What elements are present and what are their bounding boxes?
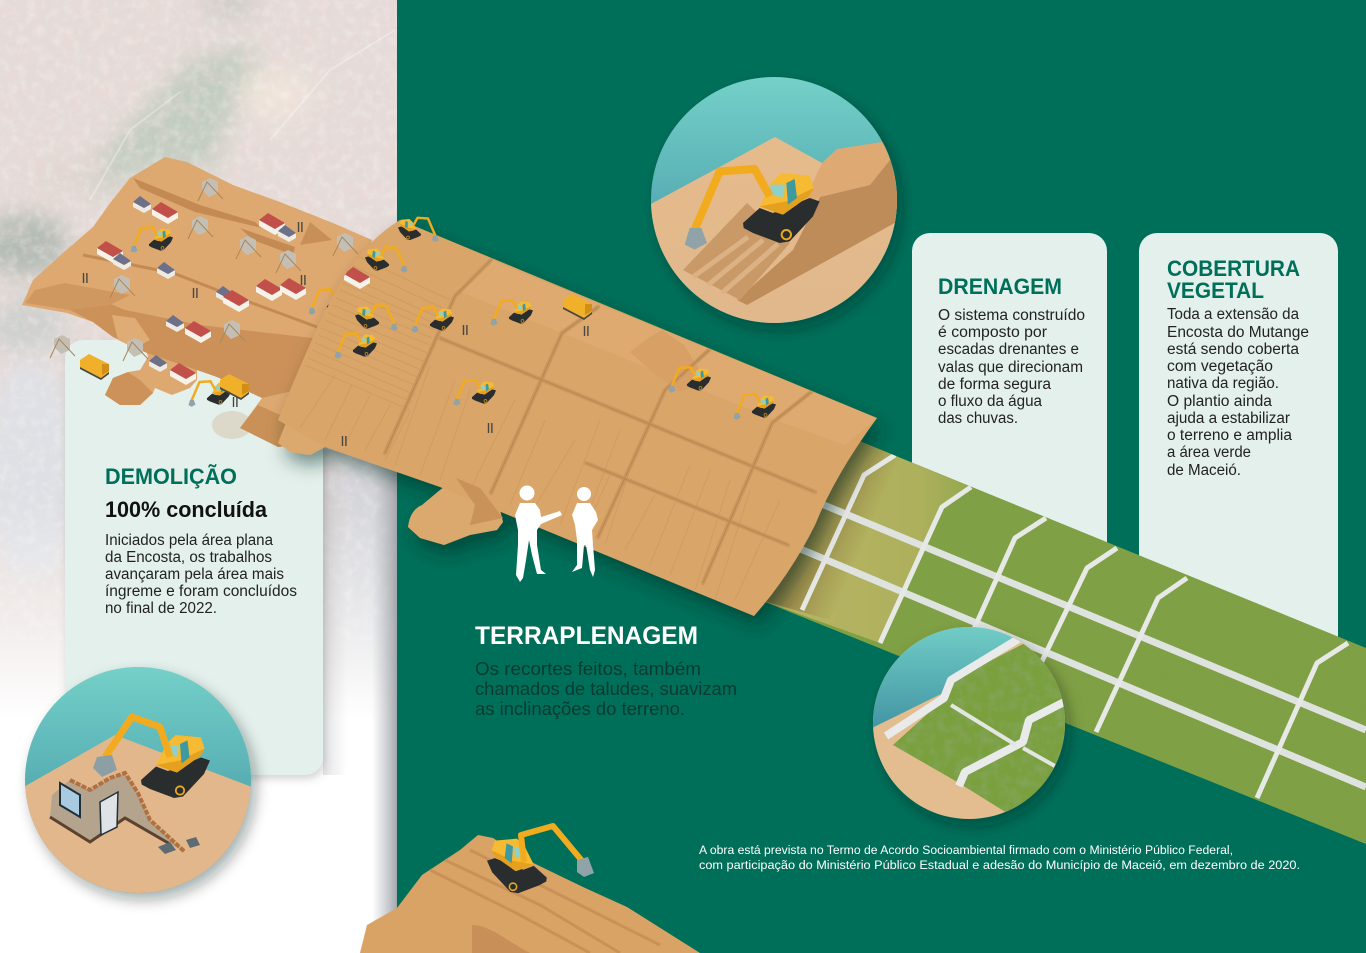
olive newly planted section [760, 440, 971, 643]
panel: drenagem card [912, 233, 1107, 653]
terrain shading bands [70, 298, 330, 398]
footnote: com participação do Ministério Público Estadual e adesão do Município de Maceió, em dezembro de 2020. [699, 858, 1300, 872]
circle: vegetation close-up [873, 627, 1065, 819]
heading and text: cobertura vegetal: a área verde [1167, 444, 1251, 461]
drainage channels [385, 260, 815, 583]
heading and text: cobertura vegetal: COBERTURA [1167, 256, 1300, 281]
aerial photo background [0, 0, 397, 953]
heading and text: cobertura vegetal: de Maceió. [1167, 462, 1241, 479]
heading and text: demolição: 100% concluída [105, 497, 268, 522]
terrain: demolition hillside [22, 157, 372, 447]
heading and text: terraplenagem: Os recortes feitos, também [475, 659, 701, 679]
heading and text: terraplenagem: as inclinações do terreno. [475, 699, 685, 719]
silhouettes of two people [515, 486, 598, 582]
heading and text: cobertura vegetal: nativa da região. [1167, 375, 1279, 392]
concrete stairs [886, 638, 1070, 786]
planted blocks [893, 644, 1065, 812]
person pointing [515, 486, 562, 582]
circle: excavator shaping drainage terraces [651, 77, 897, 323]
heading and text: demolição: Iniciados pela área plana [105, 532, 273, 549]
heading and text: terraplenagem [475, 622, 737, 719]
terrain: earthworks slope [278, 220, 877, 616]
person with hands on hips [572, 487, 598, 577]
dark slope face [737, 160, 900, 305]
footnote: A obra está prevista no Termo de Acordo Socioambiental firmado com o Ministério Público Federal, [699, 843, 1233, 857]
excavator [141, 735, 210, 798]
long horizontal drains [791, 500, 1366, 787]
stepped drainage stairs [802, 455, 1348, 798]
terraces [683, 203, 790, 300]
heading and text: terraplenagem: chamados de taludes, suavizam [475, 679, 737, 699]
heading and text: demolição: no final de 2022. [105, 600, 217, 617]
heading and text: demolição: íngreme e foram concluídos [105, 583, 297, 600]
heading and text: drenagem: DRENAGEM [938, 274, 1062, 299]
heading and text: drenagem: de forma segura [938, 376, 1051, 393]
green background [397, 0, 1366, 953]
panel: demolição card [65, 340, 323, 775]
mound shading [456, 478, 503, 525]
heading and text: cobertura vegetal: Encosta do Mutange [1167, 324, 1309, 341]
door [100, 792, 118, 835]
slope grain texture [300, 255, 780, 600]
excavator on mound [487, 826, 594, 893]
mound lower left [278, 413, 341, 455]
heading and text: cobertura vegetal: ajuda a estabilizar [1167, 410, 1290, 427]
heading and text: cobertura vegetal: O plantio ainda [1167, 393, 1272, 410]
heading and text: drenagem: valas que direcionam [938, 359, 1083, 376]
shadow of rubble on the card [212, 411, 252, 439]
circle: demolition of a house [25, 667, 251, 893]
heading and text: drenagem: escadas drenantes e [938, 341, 1079, 358]
heading and text: cobertura vegetal: está sendo coberta [1167, 341, 1299, 358]
footnote [699, 843, 1300, 872]
heading and text: cobertura vegetal: VEGETAL [1167, 278, 1264, 303]
mound [408, 478, 503, 545]
house remnant [344, 267, 370, 289]
panel: cobertura vegetal card [1139, 233, 1338, 753]
heading and text: drenagem: o fluxo da água [938, 393, 1042, 410]
heading and text: demolição: da Encosta, os trabalhos [105, 549, 272, 566]
strip of planted hillside with drainage stairs [760, 430, 1366, 850]
heading and text: cobertura vegetal [1167, 256, 1309, 479]
excavators on the slope [334, 218, 776, 446]
rubble [158, 837, 200, 854]
heading and text: drenagem: O sistema construído [938, 307, 1085, 324]
broken wall [50, 773, 185, 852]
window [60, 783, 80, 817]
heading and text: drenagem: das chuvas. [938, 410, 1018, 427]
heading and text: cobertura vegetal: com vegetação [1167, 358, 1273, 375]
shaded strip end near the terrain [766, 442, 890, 618]
heading and text: demolição [105, 464, 297, 617]
terrain: foreground mound with excavator [360, 826, 700, 953]
heading and text: drenagem: é composto por [938, 324, 1047, 341]
heading and text: demolição: DEMOLIÇÃO [105, 464, 237, 489]
houses [97, 196, 306, 385]
heading and text: cobertura vegetal: Toda a extensão da [1167, 306, 1299, 323]
heading and text: demolição: avançaram pela área mais [105, 566, 284, 583]
upper lighter bench [830, 398, 877, 418]
heading and text: terraplenagem: TERRAPLENAGEM [475, 622, 698, 650]
heading and text: drenagem [938, 274, 1085, 427]
heading and text: cobertura vegetal: o terreno e amplia [1167, 427, 1292, 444]
demolished structures [50, 178, 358, 361]
excavators and trucks [130, 227, 173, 253]
